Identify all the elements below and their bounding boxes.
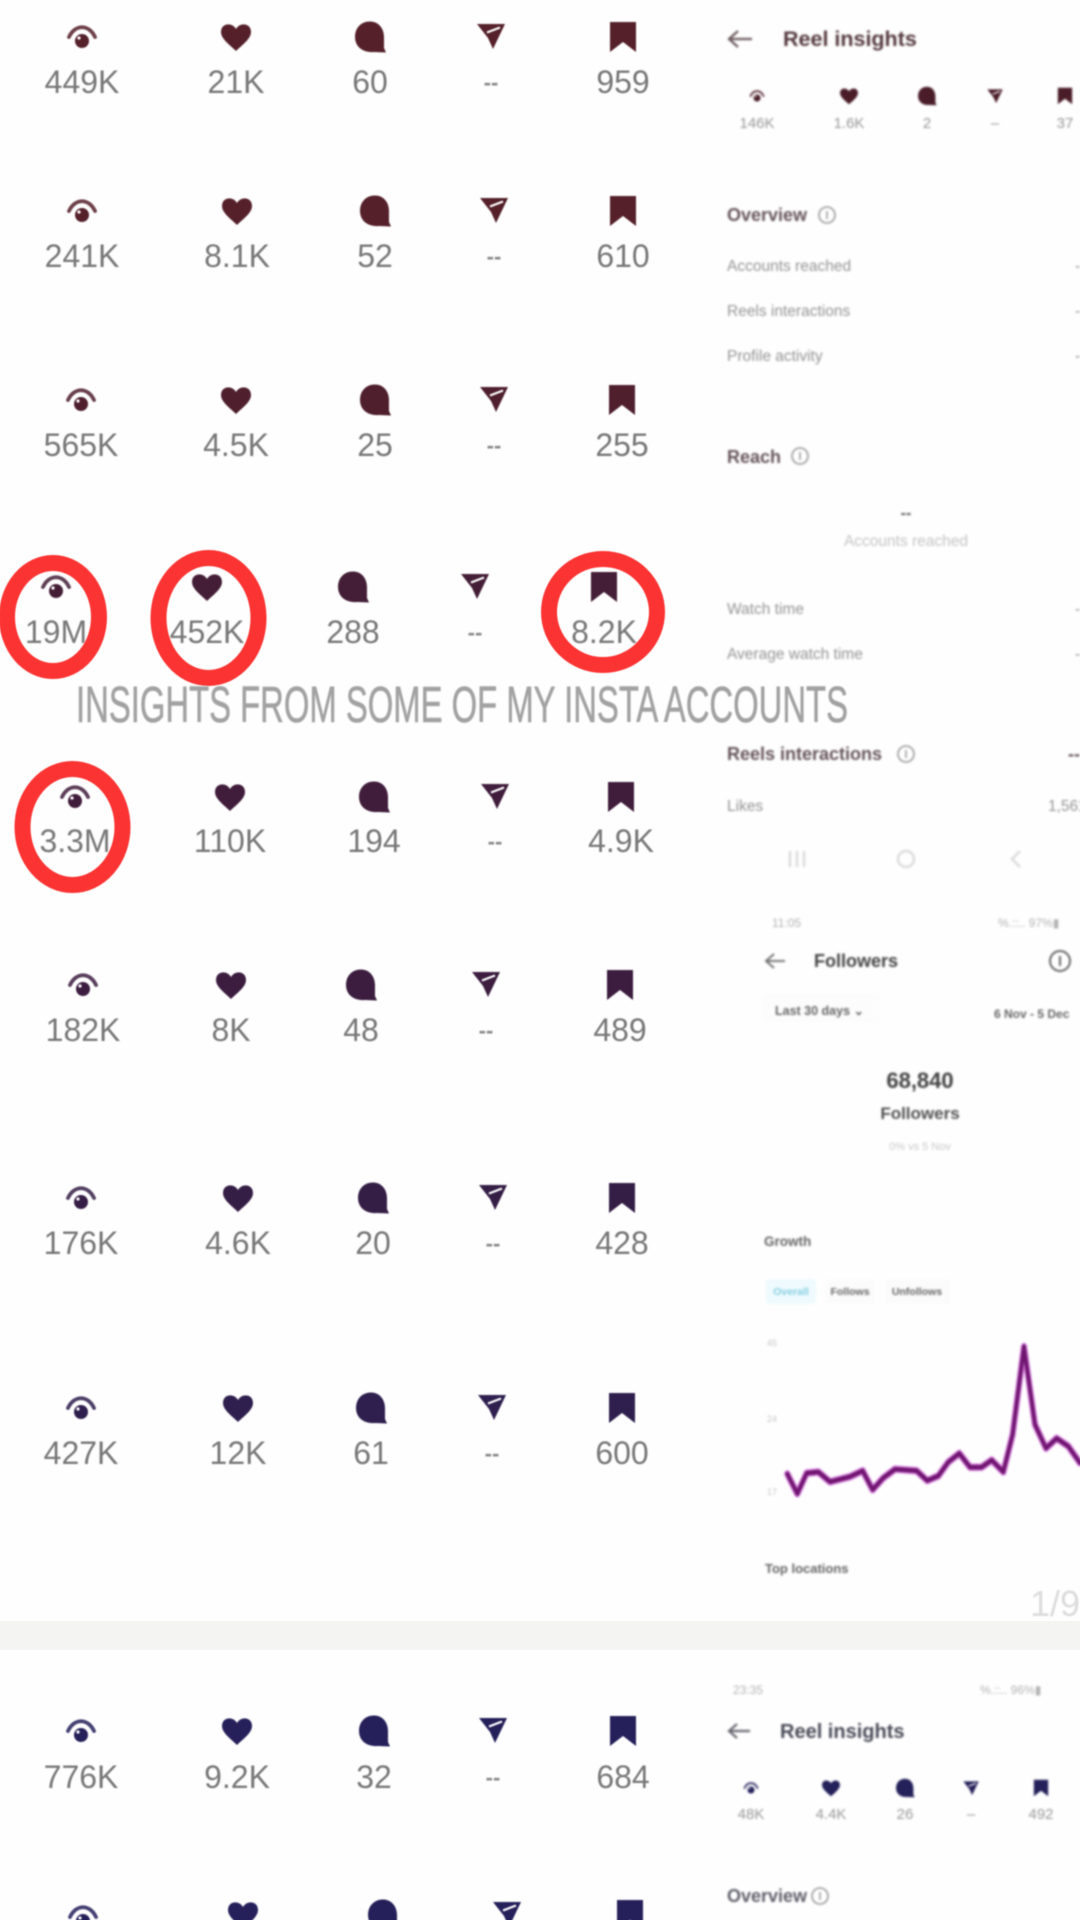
metric: reels interactions: Reels interactions — [727, 303, 850, 320]
reels interactions heading: Reels interactions — [727, 744, 882, 764]
red highlight circles — [7, 558, 657, 885]
mini views: 146K — [739, 115, 775, 132]
likes 4.5K — [203, 387, 269, 463]
date range: 6 Nov - 5 Dec — [994, 1007, 1070, 1021]
shares — [481, 784, 509, 854]
status icons: %.::.. 97%▮ — [998, 916, 1059, 930]
reels interactions block — [727, 744, 1080, 815]
mini likes — [816, 1780, 846, 1823]
comments 20 — [355, 1182, 391, 1261]
comments 288: 288 — [326, 614, 380, 650]
likes 8K — [211, 972, 251, 1048]
growth tabs: Overall — [773, 1286, 809, 1298]
stats row 1 — [45, 22, 650, 100]
views 19M — [25, 577, 87, 650]
likes 21K: 21K — [208, 64, 264, 100]
mini stats row — [738, 1779, 1054, 1823]
likes 8.1K: 8.1K — [204, 238, 270, 274]
comments 61: 61 — [353, 1435, 389, 1471]
likes 9.2K — [204, 1718, 270, 1795]
metric dashes — [1075, 258, 1080, 365]
heading: followers: Followers — [814, 951, 898, 971]
mini views: 48K — [738, 1806, 764, 1823]
heading: reel insights: Reel insights — [780, 1721, 904, 1743]
views 449K: 449K — [45, 64, 119, 100]
shares: -- — [488, 829, 502, 854]
comments 288 — [326, 572, 380, 650]
shares: -- — [486, 1231, 500, 1256]
phone nav bar — [790, 851, 1020, 867]
reels interactions value: -- — [1068, 744, 1080, 764]
mini comments — [896, 1779, 915, 1823]
saves 959 — [596, 22, 650, 100]
views 565K — [44, 390, 118, 463]
views 176K: 176K — [44, 1225, 118, 1261]
saves 8.2K — [571, 572, 637, 650]
views 182K: 182K — [46, 1012, 120, 1048]
reach caption: Accounts reached — [844, 533, 968, 550]
likes 21K — [208, 24, 264, 100]
circle: 3.3M views — [22, 769, 122, 885]
info icon — [792, 448, 808, 464]
saves 959: 959 — [596, 64, 650, 100]
stats row 10 (cropped icons) — [70, 1900, 643, 1920]
growth tabs: Follows — [830, 1286, 870, 1298]
info icon — [898, 746, 914, 762]
mini comments — [918, 87, 937, 132]
saves 4.9K — [588, 782, 654, 859]
shares — [480, 198, 508, 269]
back arrow — [729, 1724, 750, 1738]
mini likes — [834, 88, 864, 132]
follower label: Followers — [880, 1104, 960, 1123]
likes 452K — [170, 574, 244, 650]
likes 4.5K: 4.5K — [203, 427, 269, 463]
saves 600: 600 — [595, 1435, 649, 1471]
circle: 19M views — [7, 563, 99, 671]
metric: likes: Likes — [727, 798, 763, 815]
comments 52: 52 — [357, 238, 393, 274]
stats row 5 — [39, 782, 654, 859]
saves 489: 489 — [593, 1012, 647, 1048]
views 182K — [46, 975, 120, 1048]
stats row 6 — [46, 970, 647, 1048]
comments 194 — [347, 782, 401, 859]
panel: reel insights screen (top) — [727, 27, 1080, 867]
overview heading: Overview — [727, 205, 808, 225]
shares — [472, 972, 500, 1043]
date range chip: Last 30 days ⌄ — [775, 1004, 864, 1018]
mini saves: 37 — [1057, 115, 1073, 132]
likes 110K — [194, 784, 266, 859]
metric: watch time: Watch time — [727, 601, 804, 618]
shares — [479, 1185, 507, 1256]
comments 61 — [353, 1392, 389, 1471]
axis labels — [767, 1338, 777, 1497]
comments 48: 48 — [343, 1012, 379, 1048]
shares: -- — [479, 1018, 493, 1043]
likes 4.6K: 4.6K — [205, 1225, 271, 1261]
page counter: 1/9 — [1030, 1583, 1080, 1624]
likes 9.2K: 9.2K — [204, 1759, 270, 1795]
icon: views — [70, 1907, 96, 1920]
metric: accounts reached: Accounts reached — [727, 258, 851, 275]
icon: likes — [228, 1902, 258, 1920]
follower count: 68,840 — [886, 1068, 954, 1093]
back arrow — [729, 31, 752, 47]
panel: followers screen — [762, 916, 1080, 1576]
comments 48 — [343, 970, 379, 1048]
views 427K — [44, 1398, 118, 1471]
circle: 8.2K saves — [549, 559, 657, 665]
shares: -- — [485, 1441, 499, 1466]
metric: average watch time: Average watch time — [727, 646, 863, 663]
growth heading: Growth — [764, 1234, 811, 1249]
growth tabs — [766, 1279, 950, 1304]
stats row 8 — [44, 1392, 649, 1471]
shares — [461, 574, 489, 645]
shares: -- — [484, 70, 498, 95]
stats row 4 — [25, 572, 637, 650]
views 241K — [45, 201, 119, 274]
likes 12K — [210, 1395, 266, 1471]
mini shares — [963, 1781, 979, 1823]
comments 52 — [357, 196, 393, 274]
views 19M: 19M — [25, 614, 87, 650]
status time: 23:35 — [733, 1683, 763, 1697]
info icon — [819, 207, 835, 223]
comments 194: 194 — [347, 823, 401, 859]
reach value: -- — [901, 505, 911, 522]
likes 4.6K — [205, 1185, 271, 1261]
axis labels: 24 — [767, 1414, 777, 1424]
likes 110K: 110K — [194, 823, 266, 859]
comments 25 — [357, 384, 393, 463]
shares: -- — [487, 244, 501, 269]
top locations heading: Top locations — [765, 1561, 849, 1576]
saves 8.2K: 8.2K — [571, 614, 637, 650]
saves 428: 428 — [595, 1225, 649, 1261]
views 3.3M: 3.3M — [39, 823, 111, 859]
line chart: follower growth — [787, 1347, 1080, 1494]
mini comments: 26 — [897, 1806, 913, 1823]
likes 12K: 12K — [210, 1435, 266, 1471]
views 776K — [44, 1721, 118, 1795]
reach block — [727, 447, 1080, 663]
saves 255: 255 — [595, 427, 649, 463]
metric: profile activity: Profile activity — [727, 348, 823, 365]
circle: 452K likes — [158, 558, 258, 678]
watch time dashes — [1075, 601, 1080, 663]
saves 610 — [596, 196, 650, 274]
mini comments: 2 — [923, 115, 931, 132]
info icon — [812, 1888, 828, 1904]
views 565K: 565K — [44, 427, 118, 463]
shares: -- — [486, 1765, 500, 1790]
axis labels: 45 — [767, 1338, 777, 1348]
views 176K — [44, 1188, 118, 1261]
saves 684 — [596, 1716, 650, 1795]
stats row 9 — [44, 1716, 650, 1795]
saves 255 — [595, 385, 649, 463]
views 427K: 427K — [44, 1435, 118, 1471]
mini stats row — [739, 87, 1073, 132]
views 3.3M — [39, 787, 111, 859]
mini shares: – — [967, 1806, 976, 1823]
mini views — [739, 91, 775, 132]
axis labels: 17 — [767, 1487, 777, 1497]
comments 60 — [352, 22, 388, 100]
likes 452K: 452K — [170, 614, 244, 650]
likes 8.1K — [204, 198, 270, 274]
stats row 3 — [44, 384, 649, 463]
comments 60: 60 — [352, 64, 388, 100]
mini saves: 492 — [1028, 1806, 1054, 1823]
mini likes: 4.4K — [816, 1806, 846, 1823]
back arrow — [766, 954, 785, 968]
status icons: %.::.. 96%▮ — [980, 1683, 1041, 1697]
comments 32: 32 — [356, 1759, 392, 1795]
shares — [480, 387, 508, 458]
mini shares: – — [991, 115, 1000, 132]
comments 25: 25 — [357, 427, 393, 463]
panel: reel insights screen (bottom) — [727, 1683, 1054, 1906]
stats row 7 — [44, 1182, 649, 1261]
change vs previous: 0% vs 5 Nov — [889, 1141, 951, 1153]
saves 4.9K: 4.9K — [588, 823, 654, 859]
shares — [477, 24, 505, 95]
mini likes: 1.6K — [834, 115, 864, 132]
comments 20: 20 — [355, 1225, 391, 1261]
reach heading: Reach — [727, 447, 781, 467]
shares — [479, 1718, 507, 1790]
comments 32 — [356, 1716, 392, 1795]
shares — [478, 1395, 506, 1466]
icon: saves — [617, 1900, 643, 1920]
likes 8K: 8K — [211, 1012, 251, 1048]
stats row 2 — [45, 196, 650, 274]
shares: -- — [487, 433, 501, 458]
heading: reel insights: Reel insights — [783, 27, 917, 51]
views 241K: 241K — [45, 238, 119, 274]
info icon — [1050, 951, 1070, 971]
saves 428 — [595, 1183, 649, 1261]
icon: shares — [493, 1902, 521, 1920]
saves 489 — [593, 970, 647, 1048]
saves 610: 610 — [596, 238, 650, 274]
saves 600 — [595, 1393, 649, 1471]
views 776K: 776K — [44, 1759, 118, 1795]
saves 684: 684 — [596, 1759, 650, 1795]
mini views — [738, 1783, 764, 1823]
date range chip — [762, 994, 880, 1022]
section divider band — [0, 1621, 1080, 1650]
status time: 11:05 — [772, 916, 801, 930]
growth tabs: Unfollows — [892, 1286, 942, 1298]
overview block — [727, 205, 1080, 365]
overview heading: Overview — [727, 1886, 808, 1906]
views 449K — [45, 27, 119, 100]
mini saves — [1028, 1780, 1054, 1823]
icon: comments — [368, 1900, 399, 1920]
mini shares — [987, 89, 1003, 132]
shares: -- — [468, 620, 482, 645]
mini saves — [1057, 88, 1073, 132]
